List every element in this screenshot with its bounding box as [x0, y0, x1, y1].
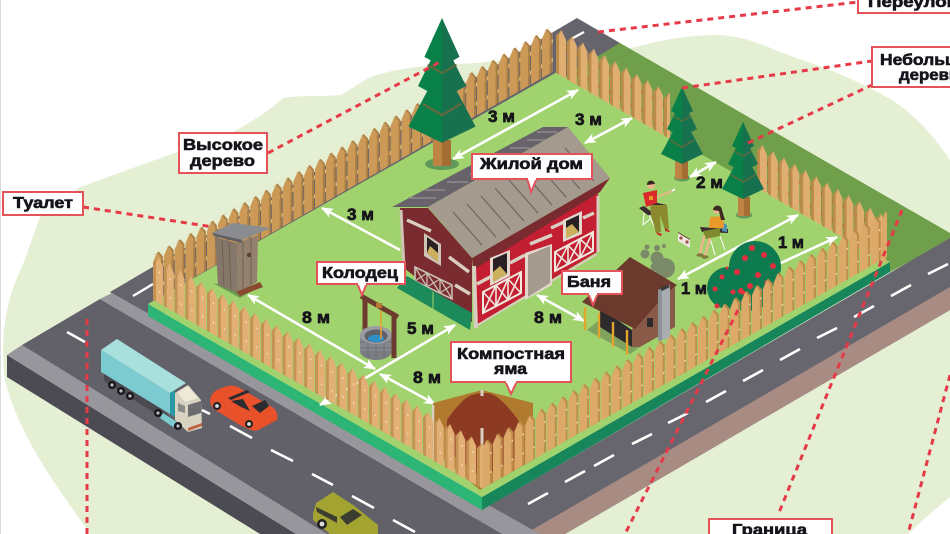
dark green strip behind right fence	[557, 43, 950, 272]
dimension labels: 1 м	[681, 279, 707, 298]
tall tree	[408, 18, 476, 170]
dimension labels: 3 м	[347, 205, 374, 224]
small tree one	[661, 87, 703, 182]
label: living house	[472, 154, 592, 192]
dimension labels: 3 м	[488, 107, 515, 126]
label: living house: Жилой дом	[479, 156, 583, 173]
label: well	[317, 262, 405, 295]
smoke	[640, 244, 675, 278]
dimension labels	[302, 107, 804, 387]
hedge at house wall	[397, 276, 472, 330]
lane behind back fence	[110, 18, 620, 322]
left road	[7, 293, 540, 534]
dimension labels: 1 м	[778, 233, 804, 252]
dimension labels: 8 м	[413, 368, 441, 387]
label: small trees	[872, 47, 950, 87]
dimension labels: 8 м	[302, 308, 330, 327]
compost pit	[433, 390, 533, 490]
outhouse	[212, 223, 271, 298]
house	[392, 127, 610, 330]
person with guitar	[639, 180, 675, 236]
front right fence	[482, 211, 887, 489]
label: compost pit: яма	[494, 361, 527, 378]
bathhouse	[582, 257, 677, 355]
back left fence	[153, 26, 553, 301]
right road	[470, 238, 950, 534]
dimension labels: 2 м	[696, 173, 723, 192]
person sitting	[696, 206, 728, 259]
truck	[101, 339, 202, 432]
label: compost pit: Компостная	[457, 346, 565, 363]
front left fence	[153, 254, 483, 489]
house door	[525, 244, 552, 300]
house windows	[424, 211, 582, 286]
label: lane	[858, 0, 950, 13]
back right fence, first part	[556, 27, 670, 139]
label: bathhouse: Баня	[567, 274, 611, 291]
label: tall tree: Высокое	[183, 137, 263, 154]
label: compost pit	[451, 342, 571, 394]
house cross panels	[415, 232, 593, 313]
dimension labels: 8 м	[534, 308, 562, 327]
green suv	[313, 492, 378, 534]
plot of land	[148, 72, 890, 510]
radio	[678, 232, 690, 248]
label: bathhouse	[562, 271, 622, 305]
label: toilet: Туалет	[13, 195, 73, 212]
label: toilet	[3, 192, 83, 215]
label: well: Колодец	[322, 265, 399, 282]
dimension labels: 3 м	[575, 110, 602, 129]
dimension labels: 5 м	[407, 319, 434, 338]
label: tall tree	[179, 133, 267, 173]
back right fence, second part	[757, 142, 887, 263]
dimension arrows	[248, 90, 837, 405]
well	[360, 296, 398, 360]
small tree two	[722, 122, 764, 218]
label: tall tree: дерево	[190, 153, 255, 170]
red car	[210, 386, 277, 431]
label: boundary	[709, 519, 832, 534]
house roof	[392, 127, 610, 258]
apple tree	[707, 241, 781, 311]
